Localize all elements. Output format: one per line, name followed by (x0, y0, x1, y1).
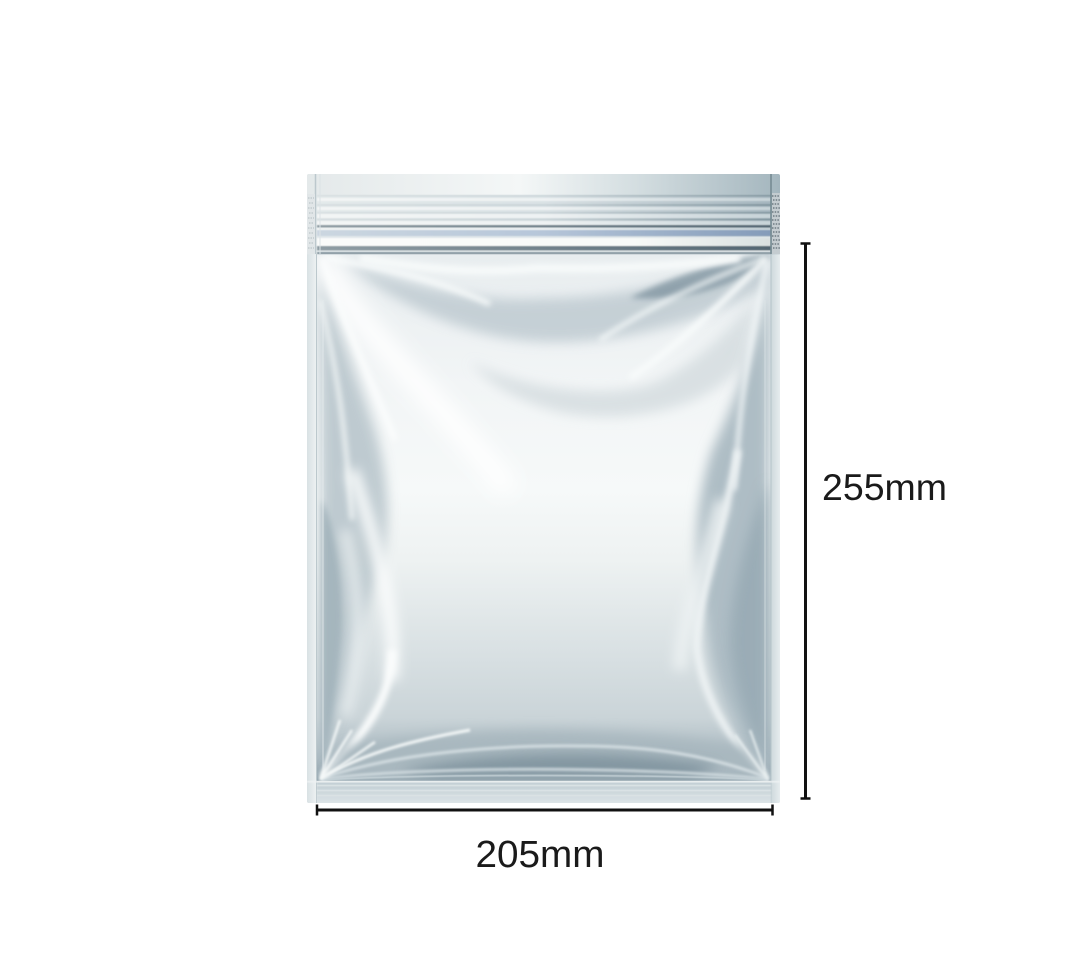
upper drape grey band (345, 254, 768, 342)
infographic: resealable bag with dimensions (307, 174, 944, 868)
left grey streak (320, 258, 387, 770)
lower left edge shade (322, 500, 342, 770)
lower right white arc (697, 450, 768, 780)
bag body with folds (317, 254, 771, 781)
side seals (307, 254, 316, 803)
right grey shade, continuous from top corner to bottom corner (697, 256, 770, 778)
upper right dark fold (630, 254, 770, 299)
width dimension arrow (317, 804, 773, 816)
bottom arc highlights (322, 730, 470, 778)
faint second drape band (482, 310, 752, 420)
textured zip ends (307, 193, 780, 254)
height label: 255mm (822, 467, 947, 508)
vertical seal-side creases (322, 324, 324, 769)
width label: 205mm (476, 834, 604, 876)
right white line (734, 262, 767, 490)
corner creases (320, 720, 375, 780)
lower left white arc (352, 470, 393, 680)
bottom seal (307, 781, 780, 803)
left white streak (317, 262, 470, 438)
top highlights (360, 258, 740, 271)
height dimension arrow (800, 243, 810, 799)
vertical seal lines (314, 174, 316, 254)
plastic zip bag (307, 174, 780, 803)
bottom dark band (322, 731, 768, 781)
zip lock band (307, 195, 780, 254)
top header strip (348, 174, 780, 196)
